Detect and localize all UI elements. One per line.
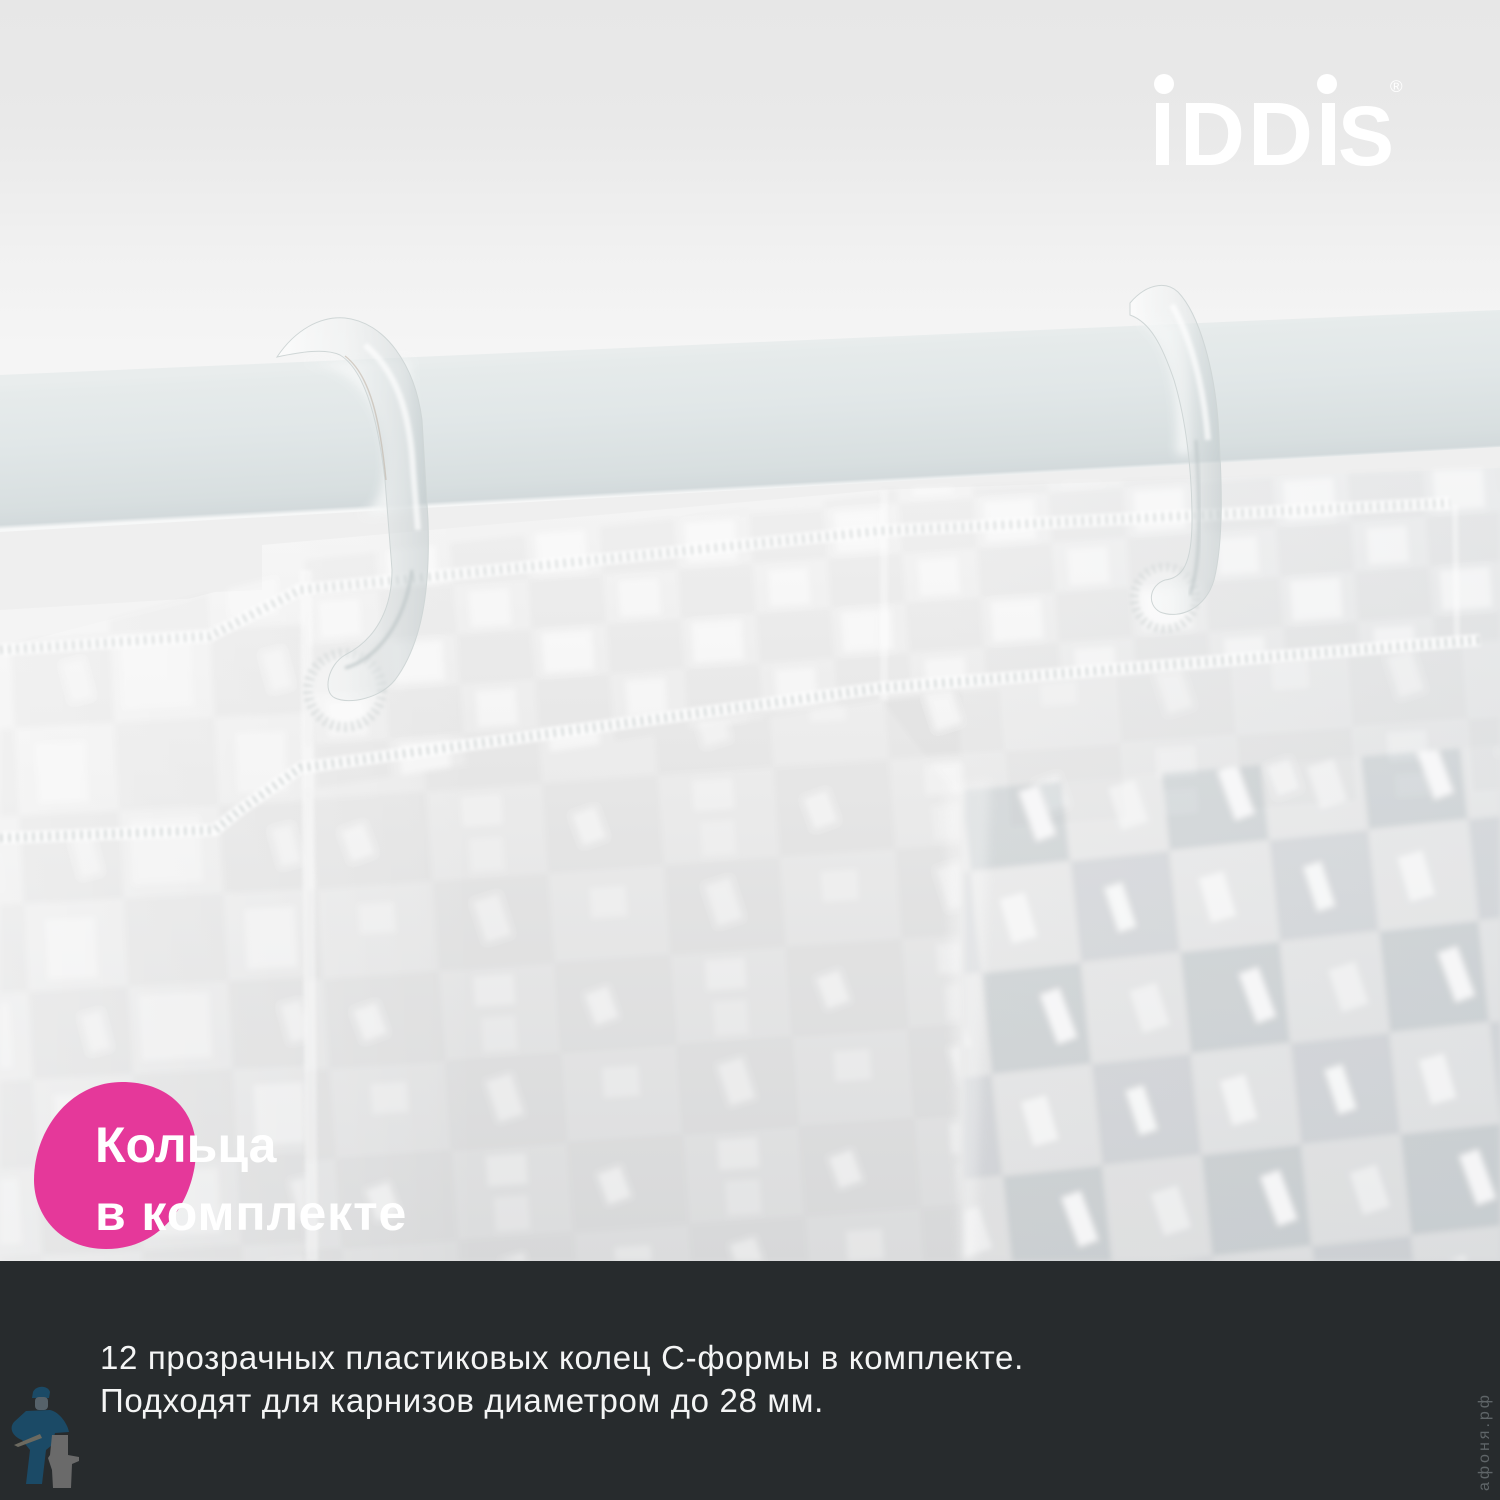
IDDIS logo: [1150, 74, 1403, 185]
ring shadow on rod right: [1140, 322, 1192, 455]
footer band: [0, 1261, 1500, 1500]
watermark: афоня.рф: [1476, 1392, 1493, 1491]
headline: [95, 1117, 407, 1241]
headline: в комплекте: [95, 1185, 407, 1241]
pink blob: [34, 1082, 196, 1249]
curtain rod: [0, 310, 1500, 532]
description text: Подходят для карнизов диаметром до 28 мм.: [100, 1382, 824, 1419]
description text: 12 прозрачных пластиковых колец С-формы в комплекте.: [100, 1339, 1024, 1376]
right C-ring: [1130, 285, 1221, 614]
ring shadow on rod: [300, 360, 415, 515]
description text: [100, 1339, 1024, 1419]
IDDIS logo: S: [1338, 89, 1394, 183]
IDDIS logo: ®: [1390, 77, 1403, 96]
left eyelet: [308, 653, 382, 727]
shower curtain: [0, 468, 1500, 1261]
right eyelet: [1134, 567, 1196, 629]
headline: Кольца: [95, 1117, 276, 1173]
shadow band under rod: [0, 440, 1500, 610]
lower stitched hem: [0, 640, 1480, 838]
left C-ring: [277, 318, 428, 701]
IDDIS logo: I: [1316, 85, 1341, 185]
IDDIS logo: IDD: [1150, 85, 1313, 185]
plumber mascot icon: [12, 1387, 79, 1488]
upper stitched hem: [0, 503, 1450, 650]
